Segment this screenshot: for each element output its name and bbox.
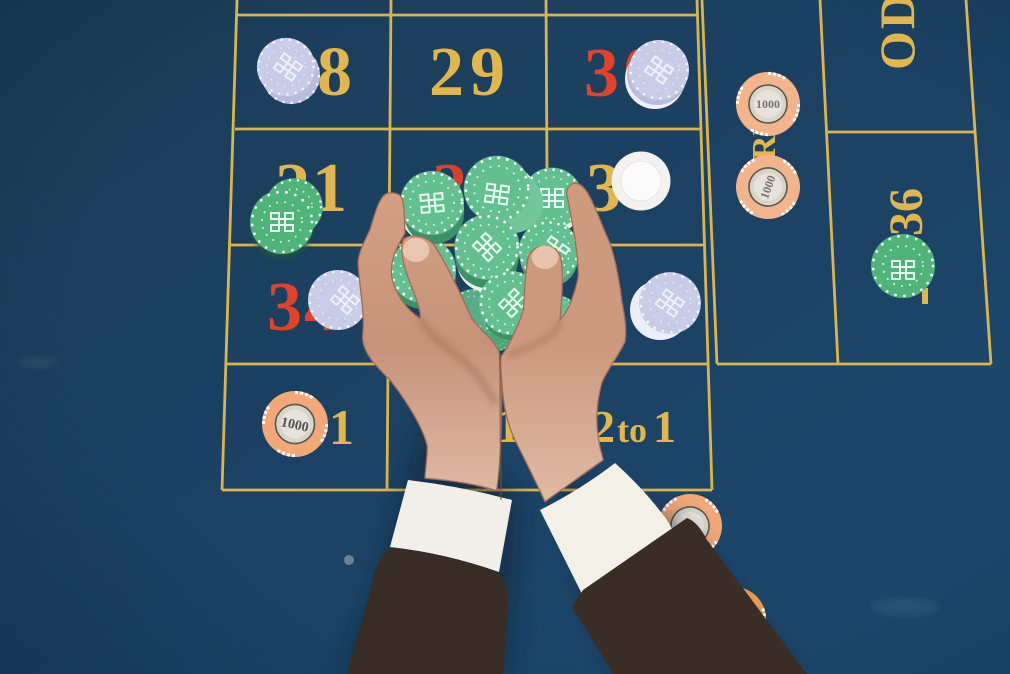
chip: orange bottom left [262, 391, 328, 457]
label RED: RED [746, 88, 783, 160]
left hand [358, 193, 502, 491]
right sleeve [572, 518, 807, 674]
number 21: 21 [275, 150, 349, 227]
chip: orange middle right [724, 143, 812, 231]
chip: orange lower under sleeve [693, 578, 775, 660]
chip: lavender stack top left [257, 38, 320, 104]
hand split shadow [500, 355, 501, 500]
chip: orange top right [736, 72, 800, 136]
number 36: 36 [880, 188, 933, 236]
right cuff [540, 463, 674, 596]
right hand [501, 183, 626, 502]
felt smudge left [18, 356, 58, 368]
chip: orange under sleeve [646, 482, 734, 570]
number 8: 8 [317, 34, 352, 111]
left thumb nail [403, 238, 429, 262]
chip: lavender stack right [630, 272, 701, 340]
chip: lavender beside 34 [308, 270, 368, 330]
chip: orange bottom left: 1000 [279, 415, 310, 436]
number 1 left: 1 [329, 399, 354, 455]
number 29: 29 [429, 34, 511, 111]
number 34: 34 [267, 269, 341, 346]
felt smudge right [871, 598, 939, 616]
hand and cuff shadows [345, 420, 790, 674]
right hand shading [507, 320, 560, 357]
chip: orange middle right: 1000 [757, 173, 779, 201]
chip: green right [871, 234, 935, 298]
chip: lavender stack top right [625, 40, 689, 109]
chip: orange top right: 1000 [756, 97, 780, 111]
number 1 center: 1 [496, 397, 521, 453]
right thumb nail [532, 246, 558, 269]
number 30: 30 [584, 35, 662, 112]
left hand shading [420, 318, 497, 403]
central chip pile [390, 156, 582, 351]
left cuff [390, 480, 512, 572]
digit 2 of 2 to 1: 2 [592, 401, 615, 452]
digit stem under chip [922, 288, 928, 304]
left sleeve [347, 548, 508, 674]
felt speck [344, 555, 354, 565]
digit 1 of 2 to 1: 1 [653, 401, 676, 452]
table numbers [267, 0, 933, 455]
number 2x: 2 [432, 150, 467, 227]
betting grid lines [222, 0, 991, 490]
word to of 2 to 1: to [617, 410, 647, 450]
chip: green left pair [250, 178, 323, 258]
number 33: 3 [586, 150, 621, 227]
chip: white [612, 152, 670, 210]
